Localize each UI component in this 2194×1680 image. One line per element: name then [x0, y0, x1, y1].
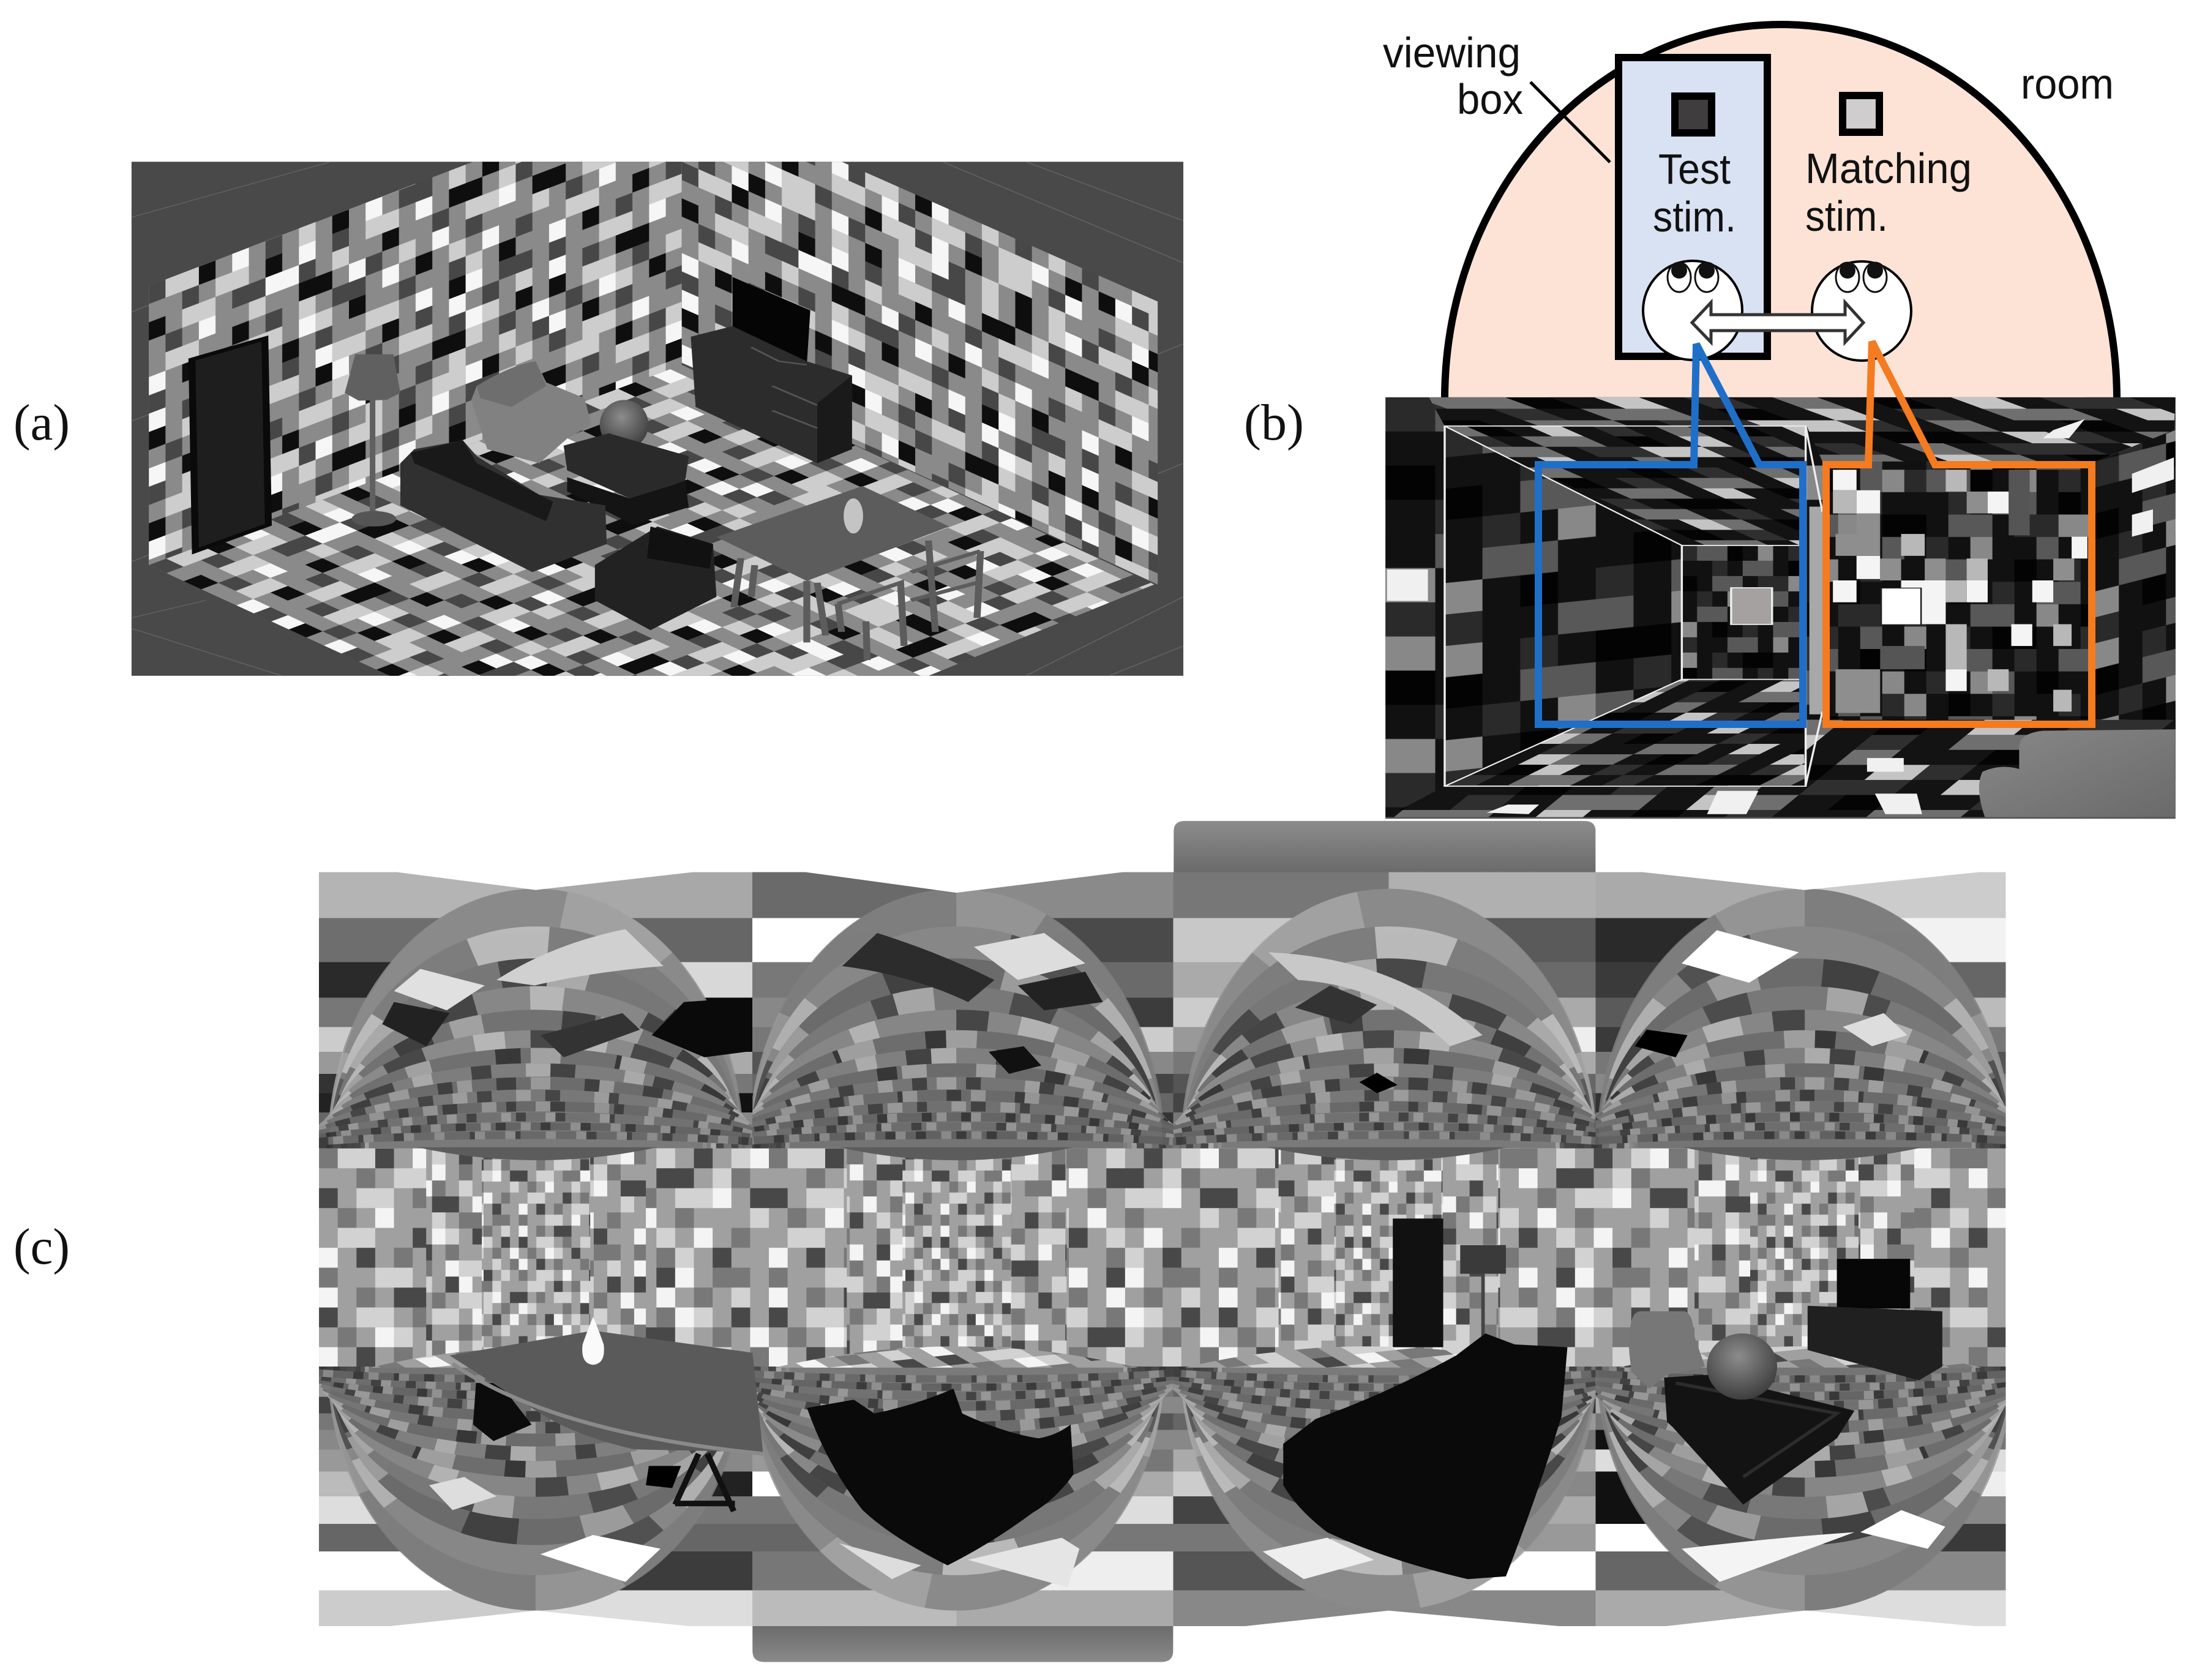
- wall corners with medium mosaic: [426, 1149, 1914, 1367]
- top extension band: [1174, 821, 1595, 891]
- text: matching stim: [1805, 144, 1972, 240]
- floor mosaic: [149, 365, 1154, 676]
- far wall bright cells: [1833, 470, 2087, 713]
- coffee table in panorama: [1664, 1375, 1854, 1505]
- sphere on side table: [600, 400, 648, 443]
- text: test stim: [1653, 145, 1736, 241]
- text: viewing box: viewing: [1383, 29, 1521, 77]
- TV cabinet: [691, 326, 852, 463]
- cabinet in panorama: [1808, 1306, 1942, 1381]
- scene bottom edge: [1385, 817, 2176, 819]
- dark sofa: [400, 440, 607, 572]
- room outline: [1445, 24, 2117, 399]
- scene image with viewing box: [1385, 397, 2176, 819]
- double-headed arrow: [1692, 302, 1863, 342]
- label (a): (a): [13, 394, 70, 451]
- wall corners with fine mosaic: [482, 1149, 1859, 1367]
- panel a: isometric room render: [132, 162, 1183, 676]
- highlighted ceiling and floor cells: [382, 929, 1945, 1588]
- dining chairs and legs: [734, 541, 981, 660]
- panorama sofa left: [807, 1389, 1074, 1566]
- blue callout frame with pointer: [1538, 344, 1803, 724]
- test stimulus in scene: [1731, 588, 1772, 624]
- TV: [733, 277, 811, 365]
- label (b): (b): [1244, 394, 1304, 451]
- text: test stim: stim.: [1653, 193, 1736, 241]
- text: matching stim: Matching: [1805, 144, 1972, 192]
- text: test stim: Test: [1658, 145, 1731, 193]
- matching stimulus in scene: [1881, 588, 1921, 624]
- text: viewing box: [1383, 29, 1523, 123]
- wedge side of box: [1810, 506, 1822, 714]
- matching stimulus square: [1843, 96, 1879, 132]
- test stimulus square: [1675, 96, 1712, 133]
- scene right wall: [2095, 430, 2176, 731]
- scene floor: [1385, 720, 2176, 817]
- ceiling domes: [284, 889, 2057, 1149]
- floor grid lines: [132, 162, 1183, 676]
- test box ceiling: [1445, 426, 1806, 546]
- dark armchair: [595, 527, 716, 630]
- leader line: [1530, 82, 1610, 162]
- bottom extension band: [752, 1610, 1173, 1662]
- scene far wall: [1822, 462, 2095, 720]
- armchair in panorama: [1629, 1311, 1705, 1389]
- test box back wall: [1682, 546, 1800, 680]
- viewing box: [1619, 58, 1767, 356]
- dining table in panorama: [449, 1330, 763, 1511]
- floor domes: [284, 1367, 2057, 1611]
- text: room: room: [2021, 60, 2114, 108]
- side table: [564, 433, 689, 525]
- test box left wall: [1445, 426, 1682, 786]
- panorama sofa right: [1283, 1333, 1567, 1579]
- orange callout frame with pointer: [1826, 342, 2092, 724]
- lamp in panorama: [1460, 1245, 1506, 1344]
- wall band mosaic: [319, 1149, 2005, 1367]
- floor lamp: [345, 354, 400, 527]
- scene background: [1385, 397, 2176, 817]
- text: matching stim: stim.: [1805, 192, 1888, 240]
- scene bright cells: [1387, 419, 2174, 814]
- room semicircle: [1445, 24, 2117, 399]
- label (c): (c): [13, 1218, 70, 1275]
- grey armchair: [471, 361, 591, 463]
- observer head right: [1812, 261, 1911, 361]
- panel a background: [132, 162, 1183, 676]
- door in panorama: [1393, 1218, 1443, 1347]
- test box white outlines: [1445, 426, 1822, 786]
- left wall mosaic: [149, 162, 682, 565]
- sofa corner: [1979, 729, 2176, 817]
- vase in panorama: [582, 1317, 604, 1365]
- dining table: [716, 486, 949, 581]
- floor rises at corners: [370, 1346, 1982, 1368]
- top and bottom notches: [365, 869, 2005, 1629]
- text: viewing box: box: [1457, 75, 1523, 123]
- door: [192, 339, 268, 551]
- scene ceiling: [1429, 397, 2176, 462]
- vase: [844, 498, 863, 533]
- panorama right objects: [1283, 1218, 1942, 1579]
- test box floor: [1445, 680, 1806, 786]
- ceiling and floor bands: [427, 872, 1905, 1626]
- sphere in panorama: [1707, 1333, 1777, 1400]
- panel c: equirectangular panorama: [284, 821, 2057, 1662]
- panel b: room diagram: [1383, 24, 2176, 819]
- ceiling dips at corners: [417, 1147, 1923, 1160]
- right wall mosaic: [682, 162, 1158, 585]
- observer head left: [1643, 261, 1742, 360]
- TV in panorama: [1837, 1259, 1910, 1308]
